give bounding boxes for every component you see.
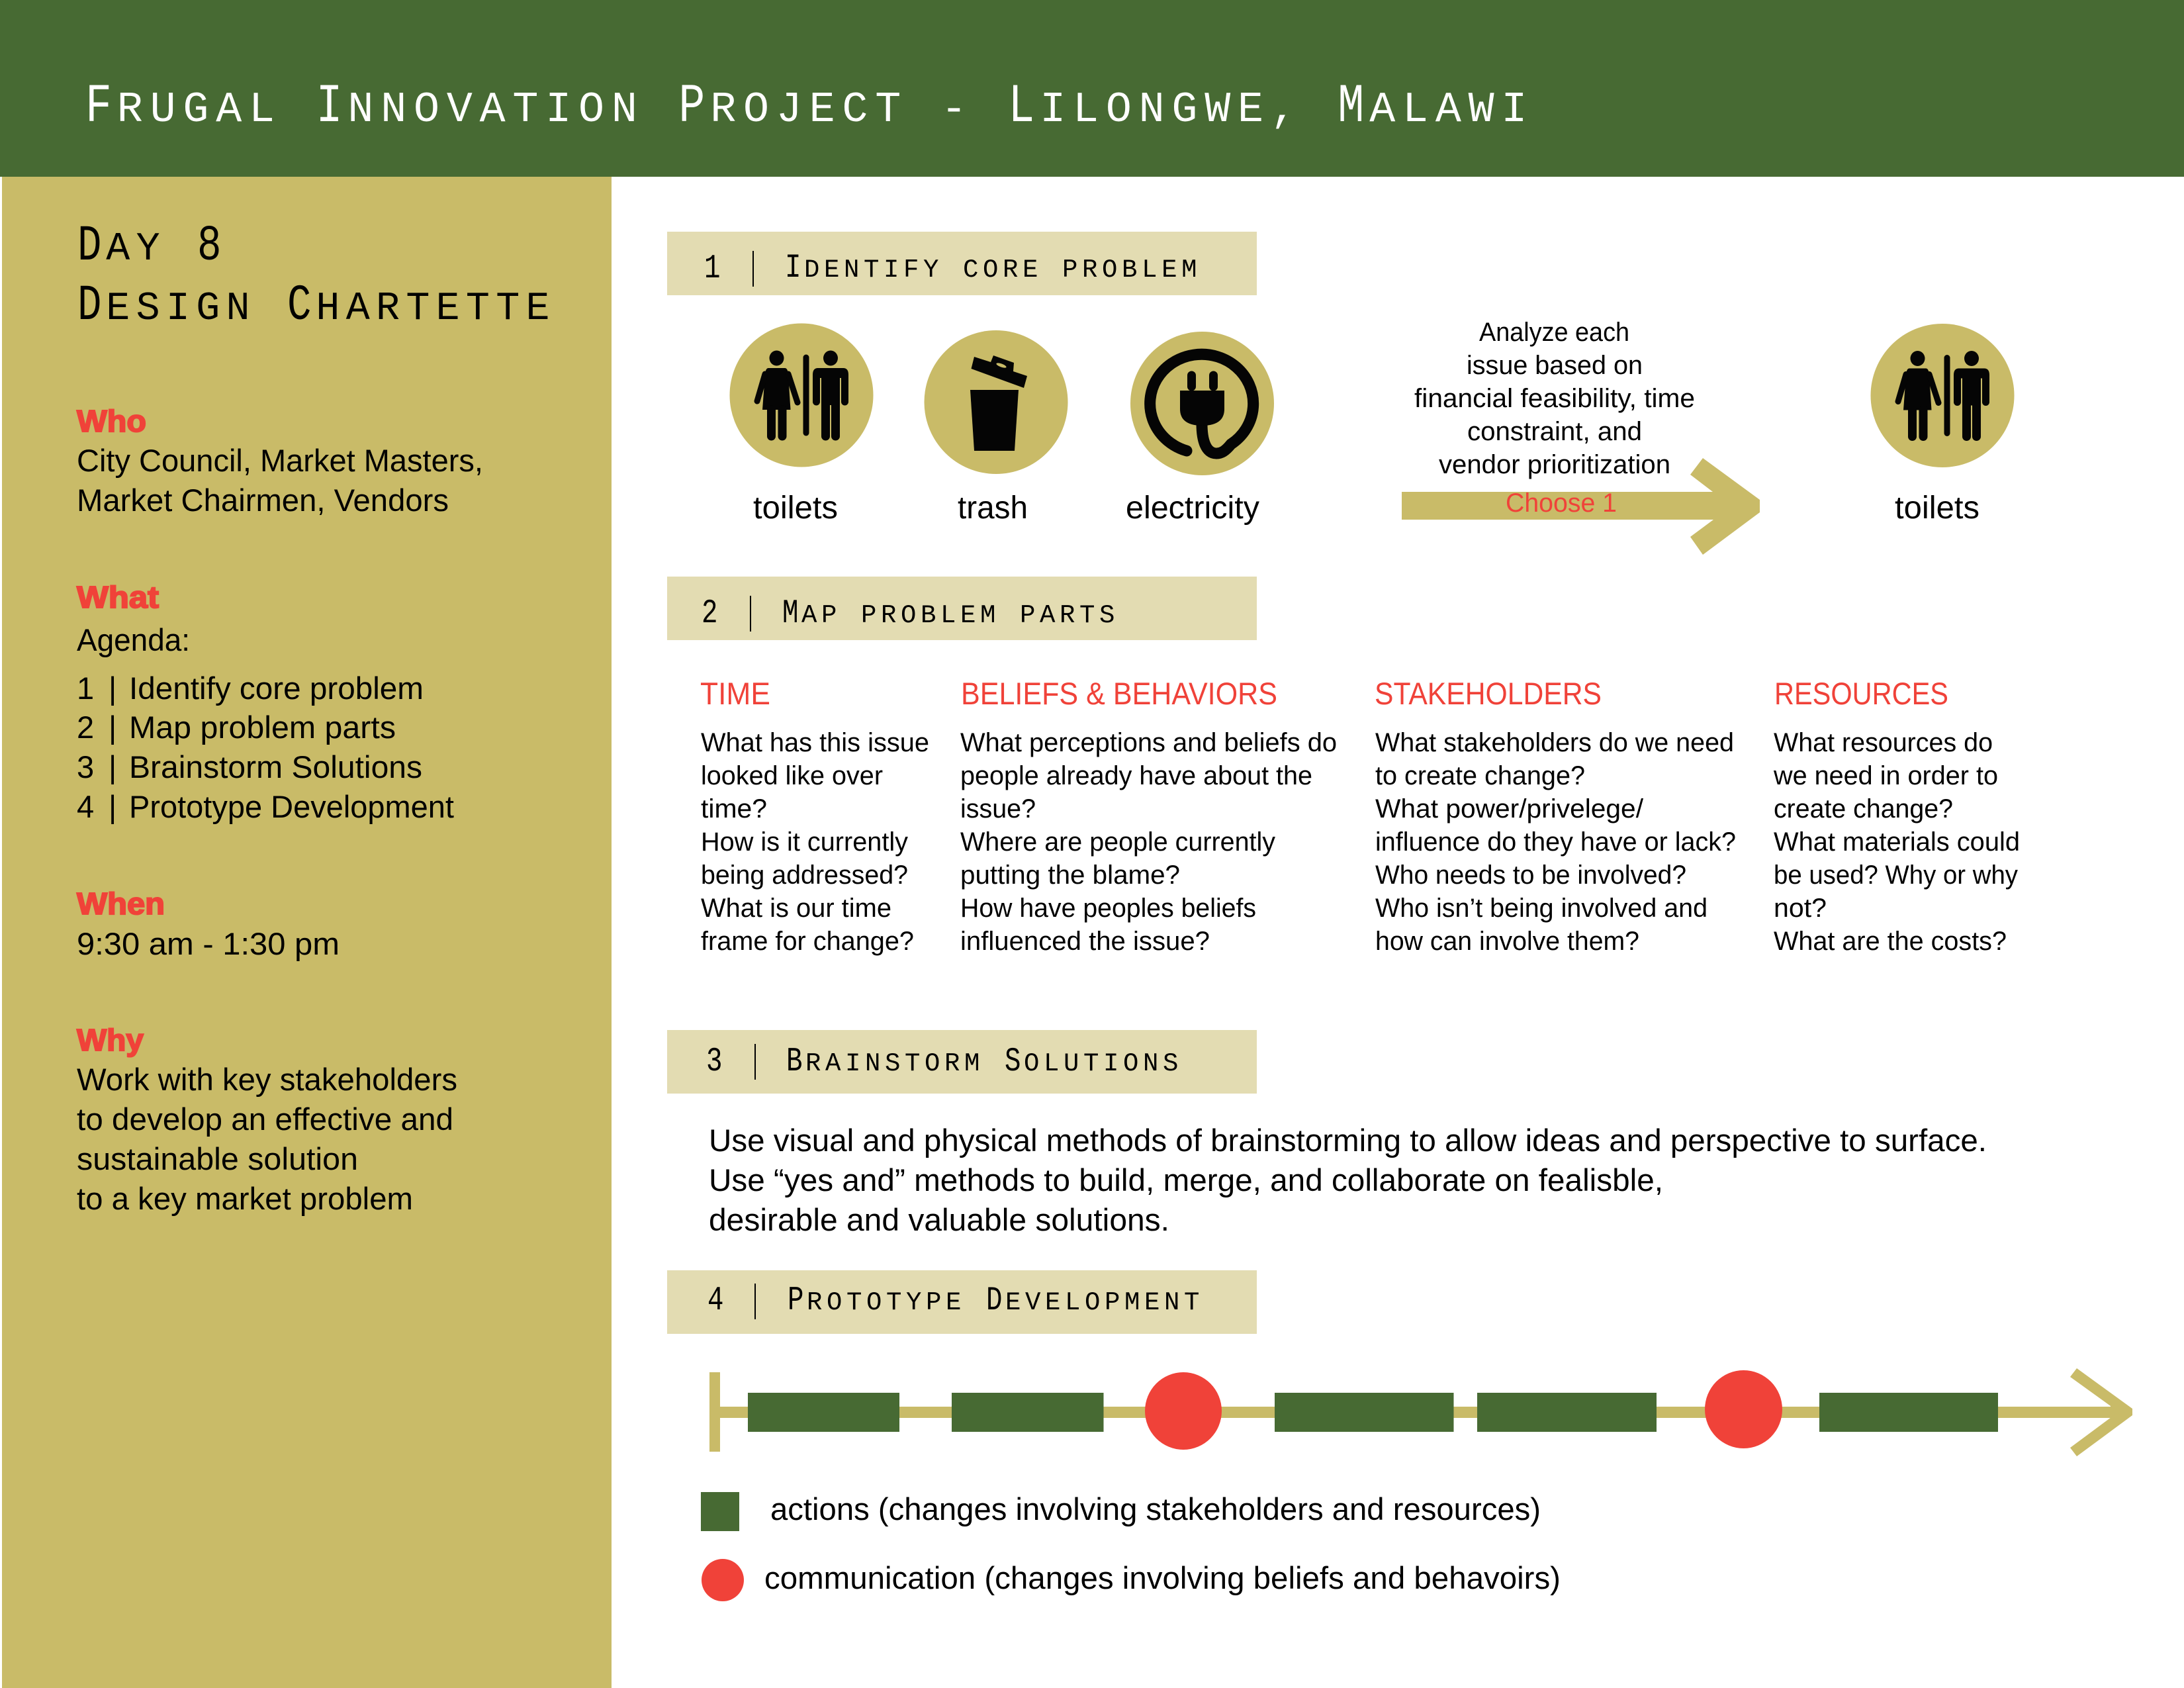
section 2 heading banner: 2 xyxy=(702,594,717,632)
section 4 heading banner: ROTOTYPE xyxy=(807,1288,966,1317)
title: ROJECT - xyxy=(710,85,974,134)
agenda list: | xyxy=(109,789,116,824)
sidebar heading xyxy=(77,218,556,334)
label: trash: trash xyxy=(958,491,1028,526)
sidebar heading: D xyxy=(77,218,101,275)
column: beliefs and behaviors: people already have about the xyxy=(960,761,1312,790)
section 2 heading banner: AP PROBLEM PARTS xyxy=(801,601,1119,630)
block: why: Work with key stakeholders xyxy=(77,1062,457,1097)
column: beliefs and behaviors: influenced the issue? xyxy=(960,927,1210,956)
section 4 heading banner: D xyxy=(986,1282,1002,1319)
section 3 heading banner: 3 xyxy=(706,1043,722,1080)
column: time: How is it currently xyxy=(701,827,908,857)
block: when xyxy=(77,886,340,961)
title: NNOVATION xyxy=(347,85,645,134)
section 4 heading banner xyxy=(667,1270,1257,1334)
column: stakeholders: how can involve them? xyxy=(1375,927,1639,956)
sidebar heading: D xyxy=(77,277,101,334)
section 3 heading banner: B xyxy=(786,1043,802,1080)
sidebar heading: HARTETTE xyxy=(316,287,556,332)
column: beliefs and behaviors: Where are people currently xyxy=(960,827,1275,857)
column: stakeholders: Who needs to be involved? xyxy=(1375,861,1686,890)
block: why: to develop an effective and xyxy=(77,1102,453,1137)
column: stakeholders xyxy=(1375,676,1736,956)
timeline xyxy=(709,1368,2132,1456)
agenda list xyxy=(77,671,454,824)
analysis text: vendor prioritization xyxy=(1439,450,1670,479)
column: stakeholders: What stakeholders do we need xyxy=(1375,728,1734,757)
block: when: When xyxy=(77,886,165,921)
title: L xyxy=(1008,75,1034,138)
sidebar heading: 8 xyxy=(197,218,221,275)
column: resources: create change? xyxy=(1774,794,1953,823)
agenda list: Identify core problem xyxy=(129,671,424,706)
label: electricity: electricity xyxy=(1126,491,1259,526)
section 1 heading banner xyxy=(667,232,1257,295)
block: when: 9:30 am - 1:30 pm xyxy=(77,926,340,961)
agenda list: | xyxy=(109,671,116,706)
block: what xyxy=(77,580,454,824)
title: M xyxy=(1338,75,1364,138)
column: time: frame for change? xyxy=(701,927,914,956)
analysis text: issue based on xyxy=(1467,351,1643,380)
title: I xyxy=(316,75,342,138)
title: ALAWI xyxy=(1369,85,1534,134)
legend: communication: communication (changes involving beliefs and behavoirs) xyxy=(764,1560,1561,1595)
block: who: City Council, Market Masters, xyxy=(77,443,483,478)
brainstorm text: Use visual and physical methods of brainstorming to allow ideas and perspective to surface. xyxy=(709,1123,1987,1158)
panel: sidebar xyxy=(2,177,612,1688)
section 1 heading banner: 1 xyxy=(704,250,720,287)
brainstorm text: Use “yes and” methods to build, merge, and collaborate on fealisble, xyxy=(709,1162,1663,1197)
block: who: Who xyxy=(77,404,146,438)
analysis text: financial feasibility, time xyxy=(1414,384,1695,413)
section 3 heading banner: OLUTIONS xyxy=(1024,1049,1183,1078)
block: who: Market Chairmen, Vendors xyxy=(77,483,449,518)
column: beliefs and behaviors: BELIEFS & BEHAVIORS xyxy=(961,676,1277,711)
agenda list: 3 xyxy=(77,749,94,784)
block: what: Agenda: xyxy=(77,622,190,657)
column: resources: What materials could xyxy=(1774,827,2020,857)
block: why xyxy=(77,1023,457,1216)
section 4 heading banner: P xyxy=(788,1282,803,1319)
timeline actions xyxy=(748,1393,1998,1432)
section 4 heading banner: EVELOPMENT xyxy=(1005,1288,1204,1317)
brainstorm text xyxy=(709,1123,1987,1237)
column: time xyxy=(700,676,929,956)
column: beliefs and behaviors: What perceptions and beliefs do xyxy=(960,728,1337,757)
column: stakeholders: STAKEHOLDERS xyxy=(1375,676,1602,711)
column: resources: What resources do xyxy=(1774,728,1993,757)
section 3 heading banner: RAINSTORM xyxy=(805,1049,984,1078)
agenda list: 1 xyxy=(77,671,94,706)
title xyxy=(85,75,1534,138)
icon: trash xyxy=(924,330,1068,474)
column: time: What has this issue xyxy=(701,728,929,757)
column: resources: RESOURCES xyxy=(1774,676,1948,711)
icon: chosen toilets xyxy=(1870,324,2015,467)
analysis text: constraint, and xyxy=(1467,417,1642,446)
agenda list: | xyxy=(109,749,116,784)
timeline arrowhead xyxy=(2070,1368,2132,1456)
agenda list: Map problem parts xyxy=(129,710,396,745)
timeline communication points xyxy=(1145,1370,1782,1450)
title: P xyxy=(678,75,705,138)
section 1 heading banner: I xyxy=(785,249,801,287)
column: resources: be used? Why or why xyxy=(1774,861,2018,890)
sidebar heading: ESIGN xyxy=(106,287,256,332)
column: beliefs and behaviors: How have peoples beliefs xyxy=(960,894,1256,923)
block: why: Why xyxy=(77,1023,144,1057)
label: toilets: toilets xyxy=(753,491,838,526)
analysis text: Analyze each xyxy=(1479,318,1629,347)
column: stakeholders: influence do they have or lack? xyxy=(1375,827,1736,857)
agenda list: Prototype Development xyxy=(129,789,454,824)
sidebar heading: AY xyxy=(106,227,166,272)
block: who xyxy=(77,404,483,518)
icon: electricity xyxy=(1130,332,1274,475)
section 3 heading banner: S xyxy=(1005,1043,1021,1080)
agenda list: 4 xyxy=(77,789,94,824)
column: time: What is our time xyxy=(701,894,891,923)
agenda list: 2 xyxy=(77,710,94,745)
column: time: TIME xyxy=(700,676,770,711)
arrow: choose 1: Choose 1 xyxy=(1506,489,1617,518)
agenda list: | xyxy=(109,710,116,745)
block: why: to a key market problem xyxy=(77,1181,413,1216)
block: why: sustainable solution xyxy=(77,1141,358,1176)
title: ILONGWE, xyxy=(1040,85,1304,134)
block: what: What xyxy=(77,580,159,614)
column: stakeholders: to create change? xyxy=(1375,761,1585,790)
legend: actions: actions (changes involving stakeholders and resources) xyxy=(770,1491,1541,1526)
icon: toilets xyxy=(729,323,874,467)
column: beliefs and behaviors: issue? xyxy=(960,794,1036,823)
column: resources: not? xyxy=(1774,894,1827,923)
arrow: choose 1 xyxy=(1402,458,1760,555)
sidebar heading: C xyxy=(287,277,311,334)
agenda list: Brainstorm Solutions xyxy=(129,749,422,784)
column: beliefs and behaviors: putting the blame? xyxy=(960,861,1180,890)
column: time: being addressed? xyxy=(701,861,908,890)
column: resources xyxy=(1773,676,2020,956)
column: time: looked like over xyxy=(701,761,883,790)
section 3 heading banner xyxy=(667,1030,1257,1094)
column: resources: What are the costs? xyxy=(1774,927,2007,956)
section 1 heading banner: DENTIFY CORE PROBLEM xyxy=(804,256,1201,285)
column: resources: we need in order to xyxy=(1773,761,1998,790)
title: F xyxy=(85,75,112,138)
title: RUGAL xyxy=(117,85,282,134)
column: time: time? xyxy=(701,794,767,823)
label: chosen toilets: toilets xyxy=(1895,491,1979,526)
section 2 heading banner xyxy=(667,577,1257,640)
column: stakeholders: What power/privelege/ xyxy=(1375,794,1644,823)
column: beliefs and behaviors xyxy=(960,676,1337,956)
column: stakeholders: Who isn’t being involved and xyxy=(1375,894,1707,923)
analysis text xyxy=(1414,318,1695,479)
section 2 heading banner: M xyxy=(782,594,798,632)
brainstorm text: desirable and valuable solutions. xyxy=(709,1202,1169,1237)
section 4 heading banner: 4 xyxy=(707,1282,723,1319)
header band xyxy=(0,0,2184,177)
